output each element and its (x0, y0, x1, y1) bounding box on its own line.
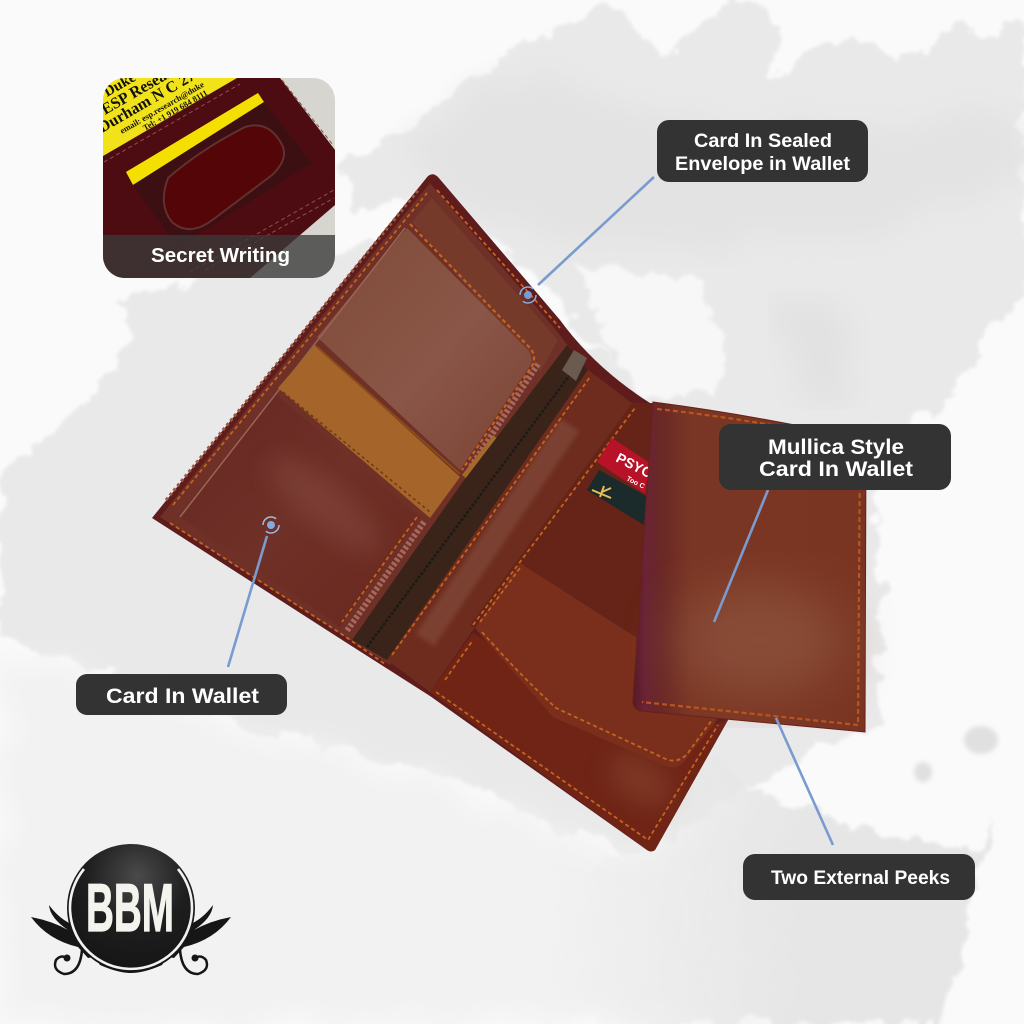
centre gusset (387, 370, 632, 692)
top right rail lining (412, 198, 558, 372)
leader line: card in wallet (228, 536, 267, 667)
caption text: Secret Writing (151, 245, 290, 267)
card peek: dark (587, 470, 646, 525)
id window (133, 102, 312, 247)
label: card in sealed envelope: Envelope in Wallet (675, 154, 851, 175)
coin pocket flap (475, 563, 717, 767)
panel stitching (166, 188, 560, 664)
caption band (103, 235, 335, 278)
inset photo: secret writing: ESP Research (98, 56, 190, 118)
card peek: red: PSYC (614, 449, 655, 481)
leader line: external peeks (776, 718, 833, 845)
lower front pocket (430, 633, 728, 852)
leader line: envelope (538, 177, 654, 285)
label: mullica style card: Mullica Style (768, 436, 904, 459)
logo ring (70, 869, 192, 969)
right panel rear pocket (470, 403, 655, 660)
label: card in sealed envelope (657, 120, 868, 182)
logo: BBM (31, 844, 231, 974)
wallet (152, 174, 728, 852)
hotspot: envelope (520, 287, 536, 303)
card peek: red: Too C (625, 476, 645, 491)
label: two external peeks (743, 854, 975, 900)
inset photo: secret writing: email: esp.research@duke (118, 79, 206, 136)
label: mullica style card (719, 424, 951, 490)
lower pocket highlight (599, 742, 681, 818)
card highlight (675, 585, 845, 695)
wallet outer shell (152, 174, 728, 852)
inset photo: secret writing (103, 78, 335, 278)
left panel leather rail (160, 183, 590, 665)
logo flourish right (131, 905, 231, 974)
label: card in sealed envelope: Card In Sealed (694, 131, 832, 152)
label: mullica style card: Card In Wallet (759, 458, 913, 481)
card peek: red (597, 438, 655, 494)
leader line: mullica (714, 490, 768, 622)
hotspot: card in wallet (263, 517, 279, 533)
oval window (164, 125, 284, 229)
lower left pocket (180, 228, 424, 632)
yellow card strip (126, 93, 264, 185)
logo disc (67, 844, 195, 972)
inset photo: secret writing: Duke (101, 69, 139, 100)
label: card in wallet: Card In Wallet (106, 685, 259, 708)
inset photo: secret writing: Tel: +1 919 684 8111 (141, 88, 209, 133)
zipper channel (352, 345, 588, 660)
logo flourish left (31, 905, 131, 974)
label: two external peeks: Two External Peeks (771, 868, 950, 889)
inset photo: secret writing: Durham N C 27 (96, 67, 198, 136)
mullica style card (633, 402, 866, 732)
label: card in wallet (76, 674, 287, 715)
zipper pull (562, 350, 587, 381)
logo letters: BBM (86, 870, 174, 946)
upper left pocket (317, 224, 538, 470)
tan elastic strap (278, 345, 517, 518)
lower pocket stitching (436, 692, 718, 840)
